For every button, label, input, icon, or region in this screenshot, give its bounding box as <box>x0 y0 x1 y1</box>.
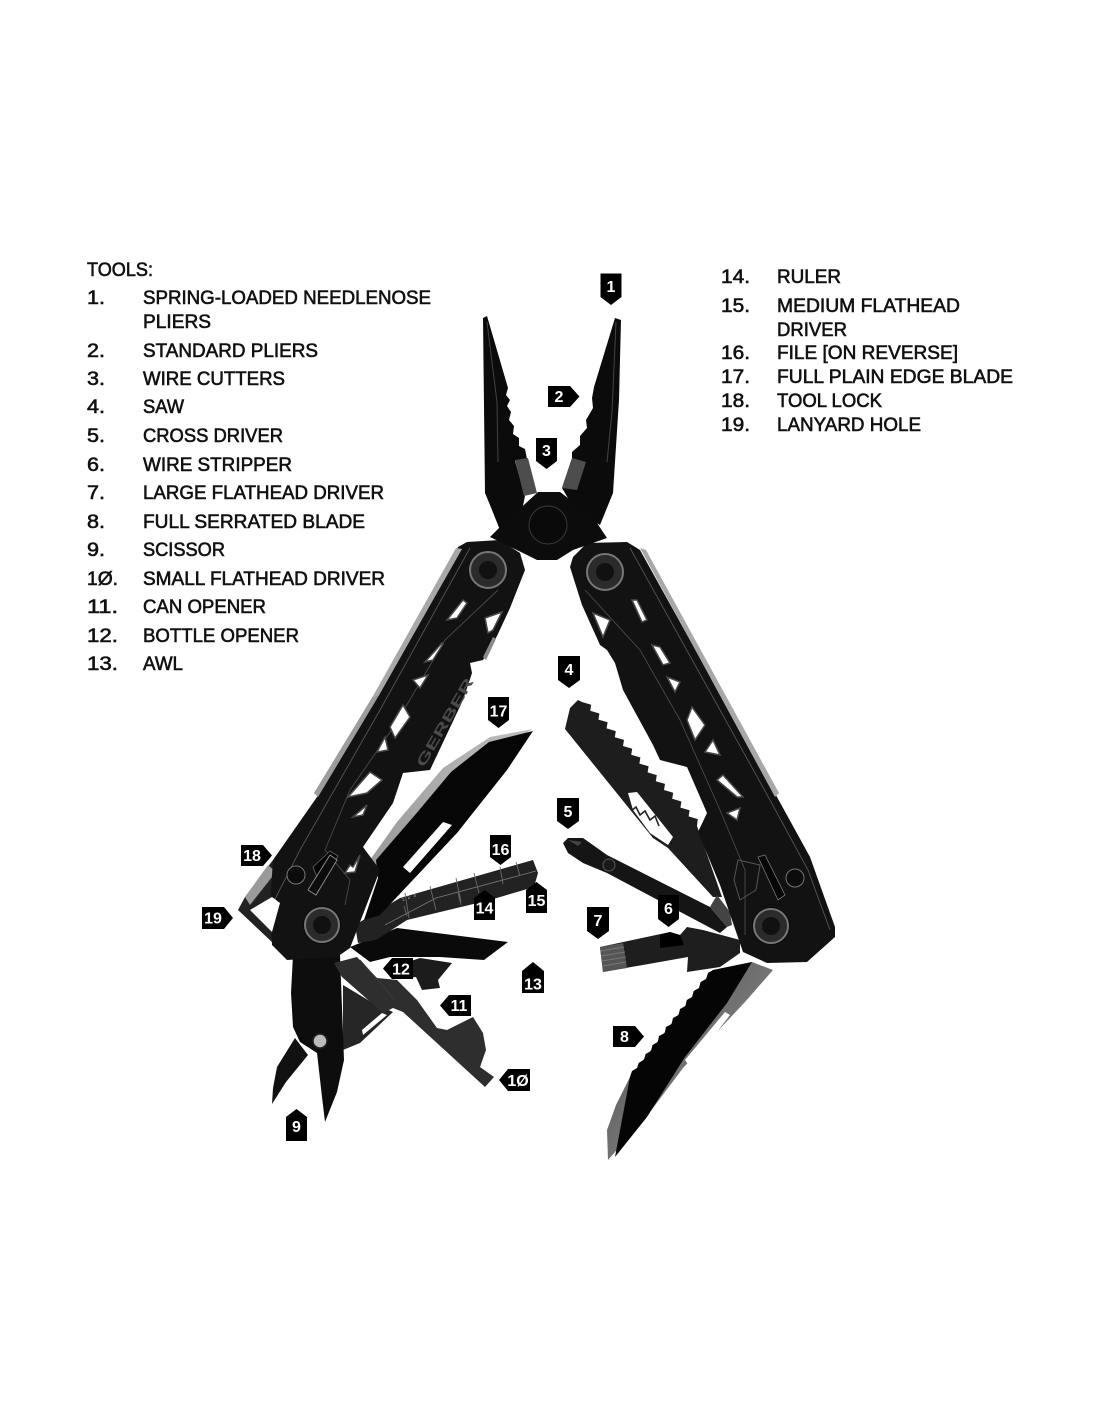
illustration: multi-tool <box>238 316 835 1160</box>
marker 14 <box>474 890 495 920</box>
marker 12: 12 <box>392 962 410 978</box>
list item 14 <box>721 267 841 288</box>
handle body <box>270 540 525 960</box>
list item 14: 14. <box>721 267 750 288</box>
marker 8 <box>613 1026 644 1047</box>
list item 12: 12. <box>87 626 118 647</box>
marker 2 <box>548 386 580 407</box>
marker 15 <box>526 882 547 913</box>
tool: bottle opener and awl <box>408 958 452 990</box>
list item 11: CAN OPENER <box>143 597 266 618</box>
list item 11: 11. <box>87 597 118 618</box>
list item 15: 15. <box>721 296 750 317</box>
marker 3: 3 <box>542 443 551 460</box>
marker 19: 19 <box>204 910 222 928</box>
tool: full plain edge blade <box>364 729 533 920</box>
list item 10: SMALL FLATHEAD DRIVER <box>143 569 385 590</box>
marker 12 <box>383 958 413 979</box>
marker 14: 14 <box>476 900 494 918</box>
marker 6 <box>658 895 679 927</box>
tool: cross driver <box>563 838 727 933</box>
list item 18: TOOL LOCK <box>777 391 882 412</box>
list item 19: LANYARD HOLE <box>777 415 921 436</box>
tool: medium blade <box>350 928 508 962</box>
list item 15: MEDIUM FLATHEAD <box>777 296 960 317</box>
list item 13: 13. <box>87 654 118 675</box>
list item 12: BOTTLE OPENER <box>143 626 299 647</box>
marker 5 <box>557 798 579 829</box>
marker 10: 1Ø <box>507 1073 529 1090</box>
list item 1: PLIERS <box>143 312 211 333</box>
tool: full serrated blade <box>607 962 773 1160</box>
tool: pliers head <box>483 316 621 560</box>
wire cutters <box>515 458 586 496</box>
list item 9: SCISSOR <box>143 540 225 561</box>
marker 4: 4 <box>565 662 574 679</box>
list item 8: FULL SERRATED BLADE <box>143 512 365 533</box>
list item 13: AWL <box>143 654 183 675</box>
lanyard hole <box>238 860 290 945</box>
text block: tools list 1-13 <box>87 260 431 675</box>
list item 6: 6. <box>87 455 105 476</box>
list item 5: 5. <box>87 426 105 447</box>
marker 2: 2 <box>555 389 564 406</box>
heading: tools: TOOLS: <box>87 260 153 281</box>
marker 10 <box>499 1069 530 1091</box>
screw <box>752 907 790 945</box>
marker 9: 9 <box>292 1119 301 1136</box>
text block: tools list 14-19 <box>721 267 1013 436</box>
list item 15: DRIVER <box>777 320 847 341</box>
tool: large flathead driver <box>600 927 740 972</box>
list item 9: 9. <box>87 540 105 561</box>
marker 5: 5 <box>564 804 573 821</box>
right handle windows <box>593 600 743 820</box>
marker 17: 17 <box>490 704 508 720</box>
list item 2: STANDARD PLIERS <box>143 341 318 362</box>
left jaw with teeth <box>483 316 527 530</box>
list item 15 <box>721 296 960 341</box>
marker 18: 18 <box>243 848 261 865</box>
list item 18 <box>721 391 882 412</box>
engraved details <box>734 855 804 900</box>
screw <box>303 906 341 944</box>
tool: ruler and file <box>355 860 538 943</box>
tool: ruler and file: 1 2 3 <box>401 893 417 903</box>
list item 14: RULER <box>777 267 841 288</box>
left handle <box>238 540 525 960</box>
marker 16 <box>490 835 511 865</box>
right handle <box>570 542 835 963</box>
list item 16: FILE [ON REVERSE] <box>777 343 958 364</box>
left handle windows <box>250 600 502 932</box>
tool: wire stripper <box>710 895 732 927</box>
list item 10: 1Ø. <box>87 569 118 590</box>
marker 11 <box>440 995 471 1016</box>
tool: scissor <box>272 955 393 1122</box>
list item 4 <box>87 397 184 418</box>
brand name: GERBER <box>413 675 477 770</box>
pivot <box>490 492 607 560</box>
marker 8: 8 <box>620 1029 629 1046</box>
marker 17 <box>488 697 509 728</box>
list item 1 <box>87 288 431 333</box>
marker 15: 15 <box>528 893 546 910</box>
marker 11: 11 <box>451 998 468 1015</box>
marker 7: 7 <box>594 913 603 930</box>
list item 3: WIRE CUTTERS <box>143 369 285 390</box>
callout markers <box>202 274 679 1141</box>
list item 1: 1. <box>87 288 105 309</box>
list item 19: 19. <box>721 415 750 436</box>
list item 7: LARGE FLATHEAD DRIVER <box>143 483 384 504</box>
list item 4: 4. <box>87 397 105 418</box>
list item 13 <box>87 654 183 675</box>
list item 1: SPRING-LOADED NEEDLENOSE <box>143 288 431 309</box>
marker 3 <box>536 438 557 469</box>
tool lock <box>287 851 338 895</box>
list item 9 <box>87 540 225 561</box>
marker 6: 6 <box>664 901 673 918</box>
list item 5: CROSS DRIVER <box>143 426 283 447</box>
marker 13: 13 <box>524 976 542 994</box>
list item 17: FULL PLAIN EDGE BLADE <box>777 367 1013 388</box>
marker 16: 16 <box>492 842 510 859</box>
marker 13 <box>522 962 544 994</box>
list item 3: 3. <box>87 369 105 390</box>
screw <box>586 553 624 591</box>
list item 6: WIRE STRIPPER <box>143 455 292 476</box>
marker 1 <box>600 274 622 305</box>
list item 18: 18. <box>721 391 750 412</box>
list item 2: 2. <box>87 341 105 362</box>
list item 7: 7. <box>87 483 105 504</box>
marker 19 <box>202 907 233 929</box>
marker 18 <box>241 845 272 866</box>
list item 5 <box>87 426 283 447</box>
list item 11 <box>87 597 266 618</box>
marker 1: 1 <box>607 279 616 296</box>
list item 16: 16. <box>721 343 750 364</box>
screw <box>469 551 507 589</box>
list item 8: 8. <box>87 512 105 533</box>
tool: small flathead driver and can opener <box>334 957 494 1087</box>
marker 9 <box>286 1109 307 1141</box>
marker 7 <box>587 907 609 939</box>
marker 4 <box>558 656 580 688</box>
list item 4: SAW <box>143 397 184 418</box>
right jaw with teeth <box>562 318 621 525</box>
tool: saw <box>565 700 722 897</box>
list item 17: 17. <box>721 367 750 388</box>
